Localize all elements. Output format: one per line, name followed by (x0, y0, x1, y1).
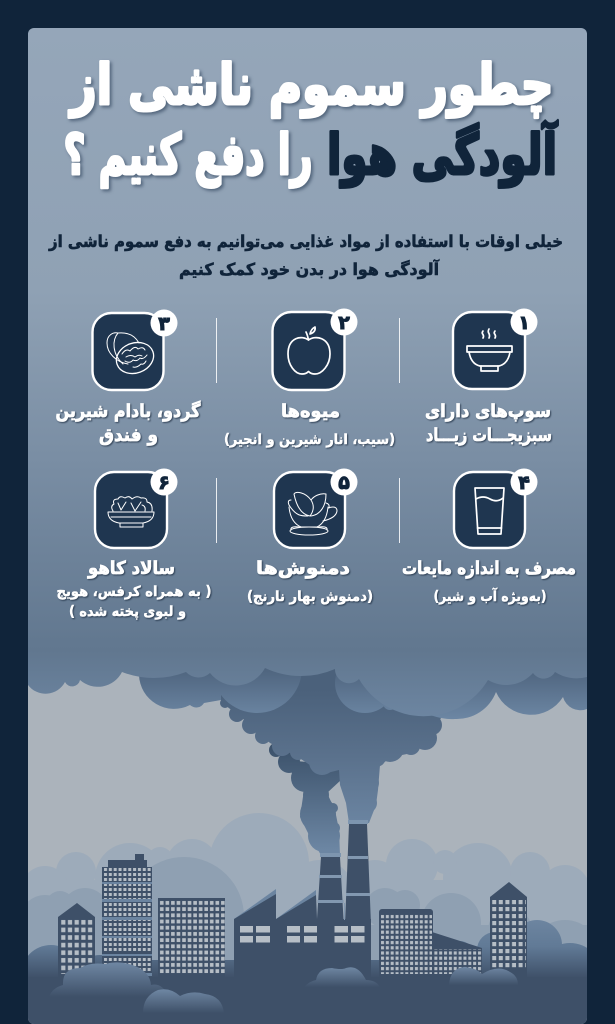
label 6: ( به همراه کرفس، هویج (56, 584, 212, 600)
title line 2: white part: را دفع کنیم ؟ (64, 123, 312, 188)
divider row 1 (216, 318, 400, 383)
item 2: fruits (224, 308, 395, 448)
label 5: دمنوش‌ها (256, 558, 350, 579)
label 2: میوه‌ها (281, 401, 340, 422)
icon: salad bowl (108, 497, 154, 527)
item 6: salad (56, 468, 212, 620)
label 2 (224, 401, 395, 448)
label 3 (56, 400, 201, 446)
icon: apple (288, 327, 330, 374)
item 5: herbal tea (247, 468, 373, 605)
divider row 2 (216, 478, 400, 543)
building: wide block (158, 898, 225, 978)
label 3: گردو، بادام شیرین (56, 400, 201, 422)
label 1: سوپ‌های دارای (425, 401, 551, 422)
badge 3: ۳ (158, 313, 170, 335)
smoke plume: second chimney and funnel (220, 660, 442, 825)
cityscape (58, 820, 527, 980)
smoke plume: first chimney (269, 743, 341, 855)
icon: tea cup (288, 492, 337, 535)
badge 4: ۴ (518, 472, 530, 494)
ground (28, 990, 587, 1024)
item 3: nuts (56, 310, 201, 446)
building: left gabled (58, 903, 95, 978)
icon: soup bowl (467, 329, 512, 371)
factory (234, 820, 371, 980)
near mist layer (28, 920, 587, 977)
label 6: سالاد کاهو (87, 558, 175, 579)
title (64, 53, 558, 188)
label 1: سبزیجـــات زیـــاد (426, 425, 552, 446)
badge 6 (150, 468, 178, 496)
foreground clouds (49, 962, 518, 1013)
front cloud layer (28, 28, 587, 716)
building: banded tower (102, 854, 152, 976)
label 6: و لبوی پخته شده ) (69, 604, 186, 620)
icon: walnut (107, 333, 158, 379)
building: right gabled (490, 882, 527, 978)
badge 5: ۵ (338, 472, 350, 494)
label 6 (56, 558, 212, 620)
icon: glass of water (475, 488, 504, 534)
item 1: soup (425, 308, 552, 446)
sky (28, 640, 587, 1024)
label 3: و فندق (99, 425, 158, 446)
intro paragraph: خیلی اوقات با استفاده از مواد غذایی می‌توانیم به دفع سموم ناشی از (48, 232, 563, 252)
label 1 (425, 401, 552, 446)
badge 2 (330, 308, 358, 336)
badge 1: ۱ (518, 312, 530, 334)
label 4 (402, 558, 576, 605)
label 2: (سیب، انار شیرین و انجیر) (224, 432, 395, 448)
badge 6: ۶ (158, 472, 170, 494)
item 4: liquids (402, 468, 576, 605)
back cloud layer (139, 672, 587, 720)
middle cloud layer (28, 857, 587, 960)
badge 3 (150, 310, 178, 336)
label 5: (دمنوش بهار نارنج) (247, 589, 373, 605)
intro paragraph (48, 232, 563, 280)
label 4: (به‌ویژه آب و شیر) (434, 587, 546, 605)
far cloud layer (28, 813, 587, 925)
label 5 (247, 558, 373, 605)
intro paragraph: آلودگی هوا در بدن خود کمک کنیم (179, 258, 439, 280)
building: right block with annex (379, 909, 482, 978)
badge 4 (510, 468, 538, 496)
label 4: مصرف به اندازه مایعات (402, 558, 576, 579)
badge 2: ۲ (338, 312, 350, 334)
